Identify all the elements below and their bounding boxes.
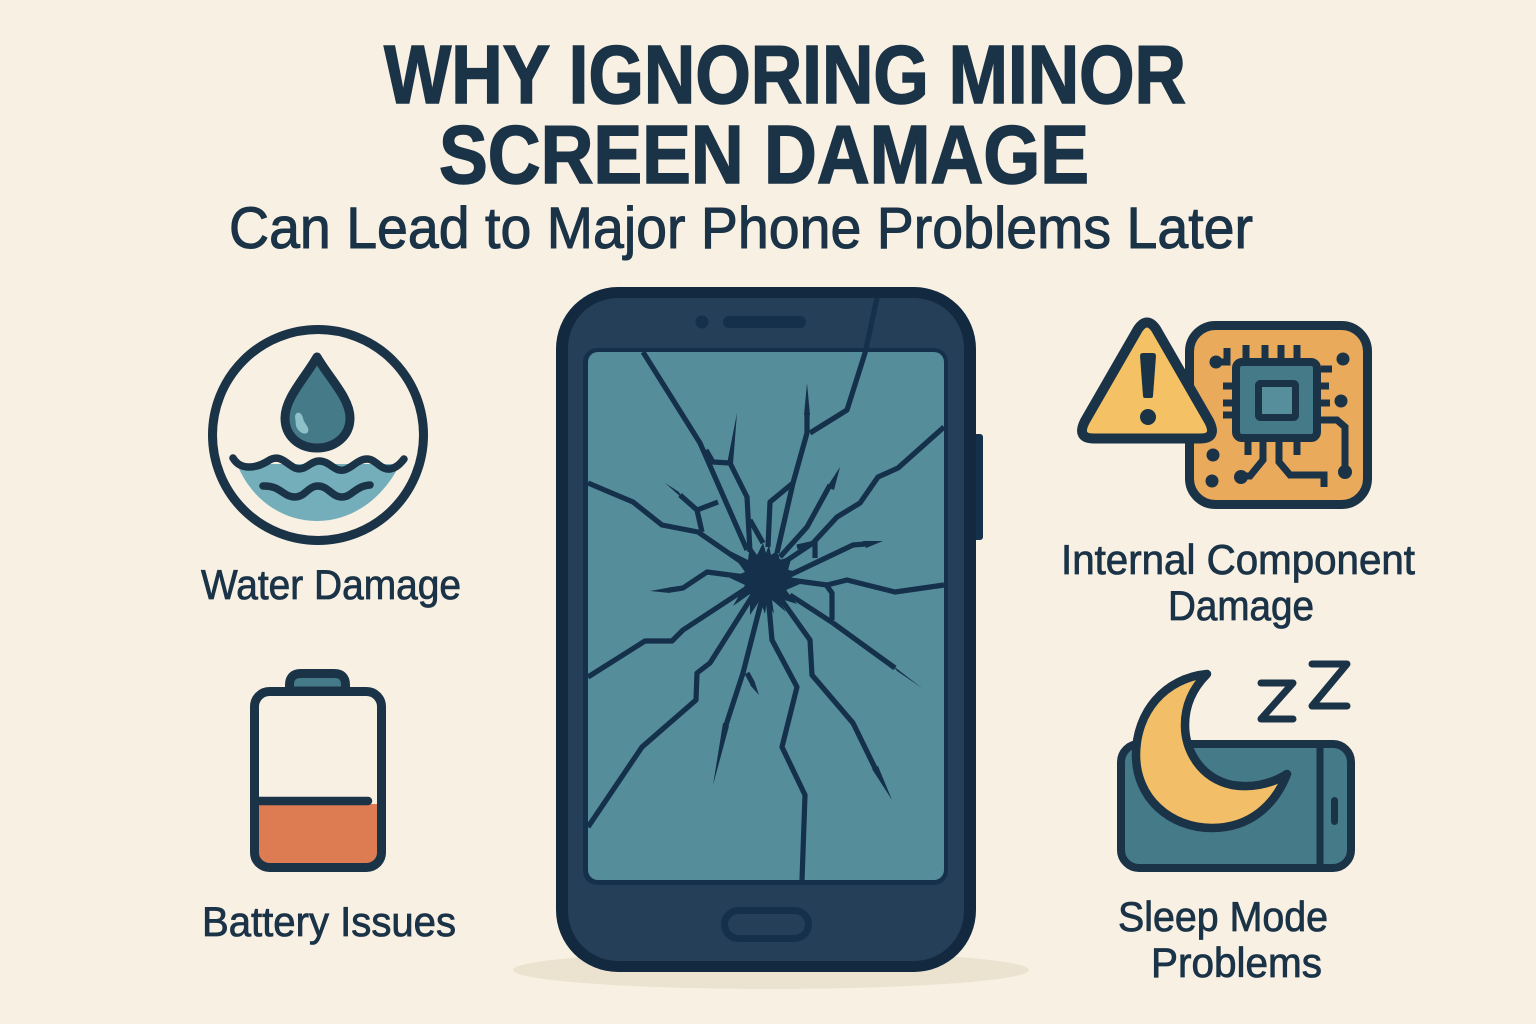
chip pins and traces (1216, 345, 1345, 487)
phone with cracked screen (556, 287, 983, 972)
icon: sleeping phone with moon (1121, 664, 1351, 868)
water pool (237, 464, 400, 521)
circuit board (1190, 326, 1368, 504)
warning triangle (1082, 322, 1212, 438)
drop highlight (295, 413, 308, 434)
label: battery issues: Battery Issues (202, 898, 456, 945)
screen cracks (588, 298, 944, 880)
home button (724, 910, 808, 938)
camera and speaker (696, 316, 806, 328)
label: water damage: Water Damage (201, 561, 461, 608)
label: sleep mode problems: Sleep Mode (1118, 893, 1328, 940)
label: internal component damage: Internal Component (1061, 536, 1415, 583)
battery cap (290, 674, 346, 691)
surface wave (233, 458, 404, 470)
moon (1136, 674, 1287, 828)
title: WHY IGNORING MINOR (384, 28, 1186, 121)
sleep Z glyphs (1261, 664, 1347, 719)
subtitle: Can Lead to Major Phone Problems Later (229, 196, 1253, 261)
phone shadow (513, 951, 1029, 989)
side button (970, 434, 983, 540)
battery charge level (259, 804, 377, 863)
label: sleep mode problems: Problems (1151, 939, 1322, 986)
inner wave (263, 485, 370, 497)
board solder points (1206, 352, 1352, 488)
phone body (556, 287, 976, 972)
crack tips and impact point (650, 383, 922, 800)
title (384, 28, 1186, 201)
icon: water drop over waves (212, 330, 424, 540)
title: SCREEN DAMAGE (439, 108, 1089, 201)
processor chip (1236, 362, 1317, 438)
drop (285, 357, 350, 448)
label: internal component damage (1061, 536, 1415, 629)
icon: circuit board with warning (1082, 322, 1368, 504)
label: internal component damage: Damage (1168, 582, 1314, 629)
screen (583, 348, 948, 885)
label: sleep mode problems (1118, 893, 1328, 986)
icon: low battery (254, 674, 382, 868)
battery case (254, 692, 382, 868)
sideways phone (1121, 744, 1351, 868)
